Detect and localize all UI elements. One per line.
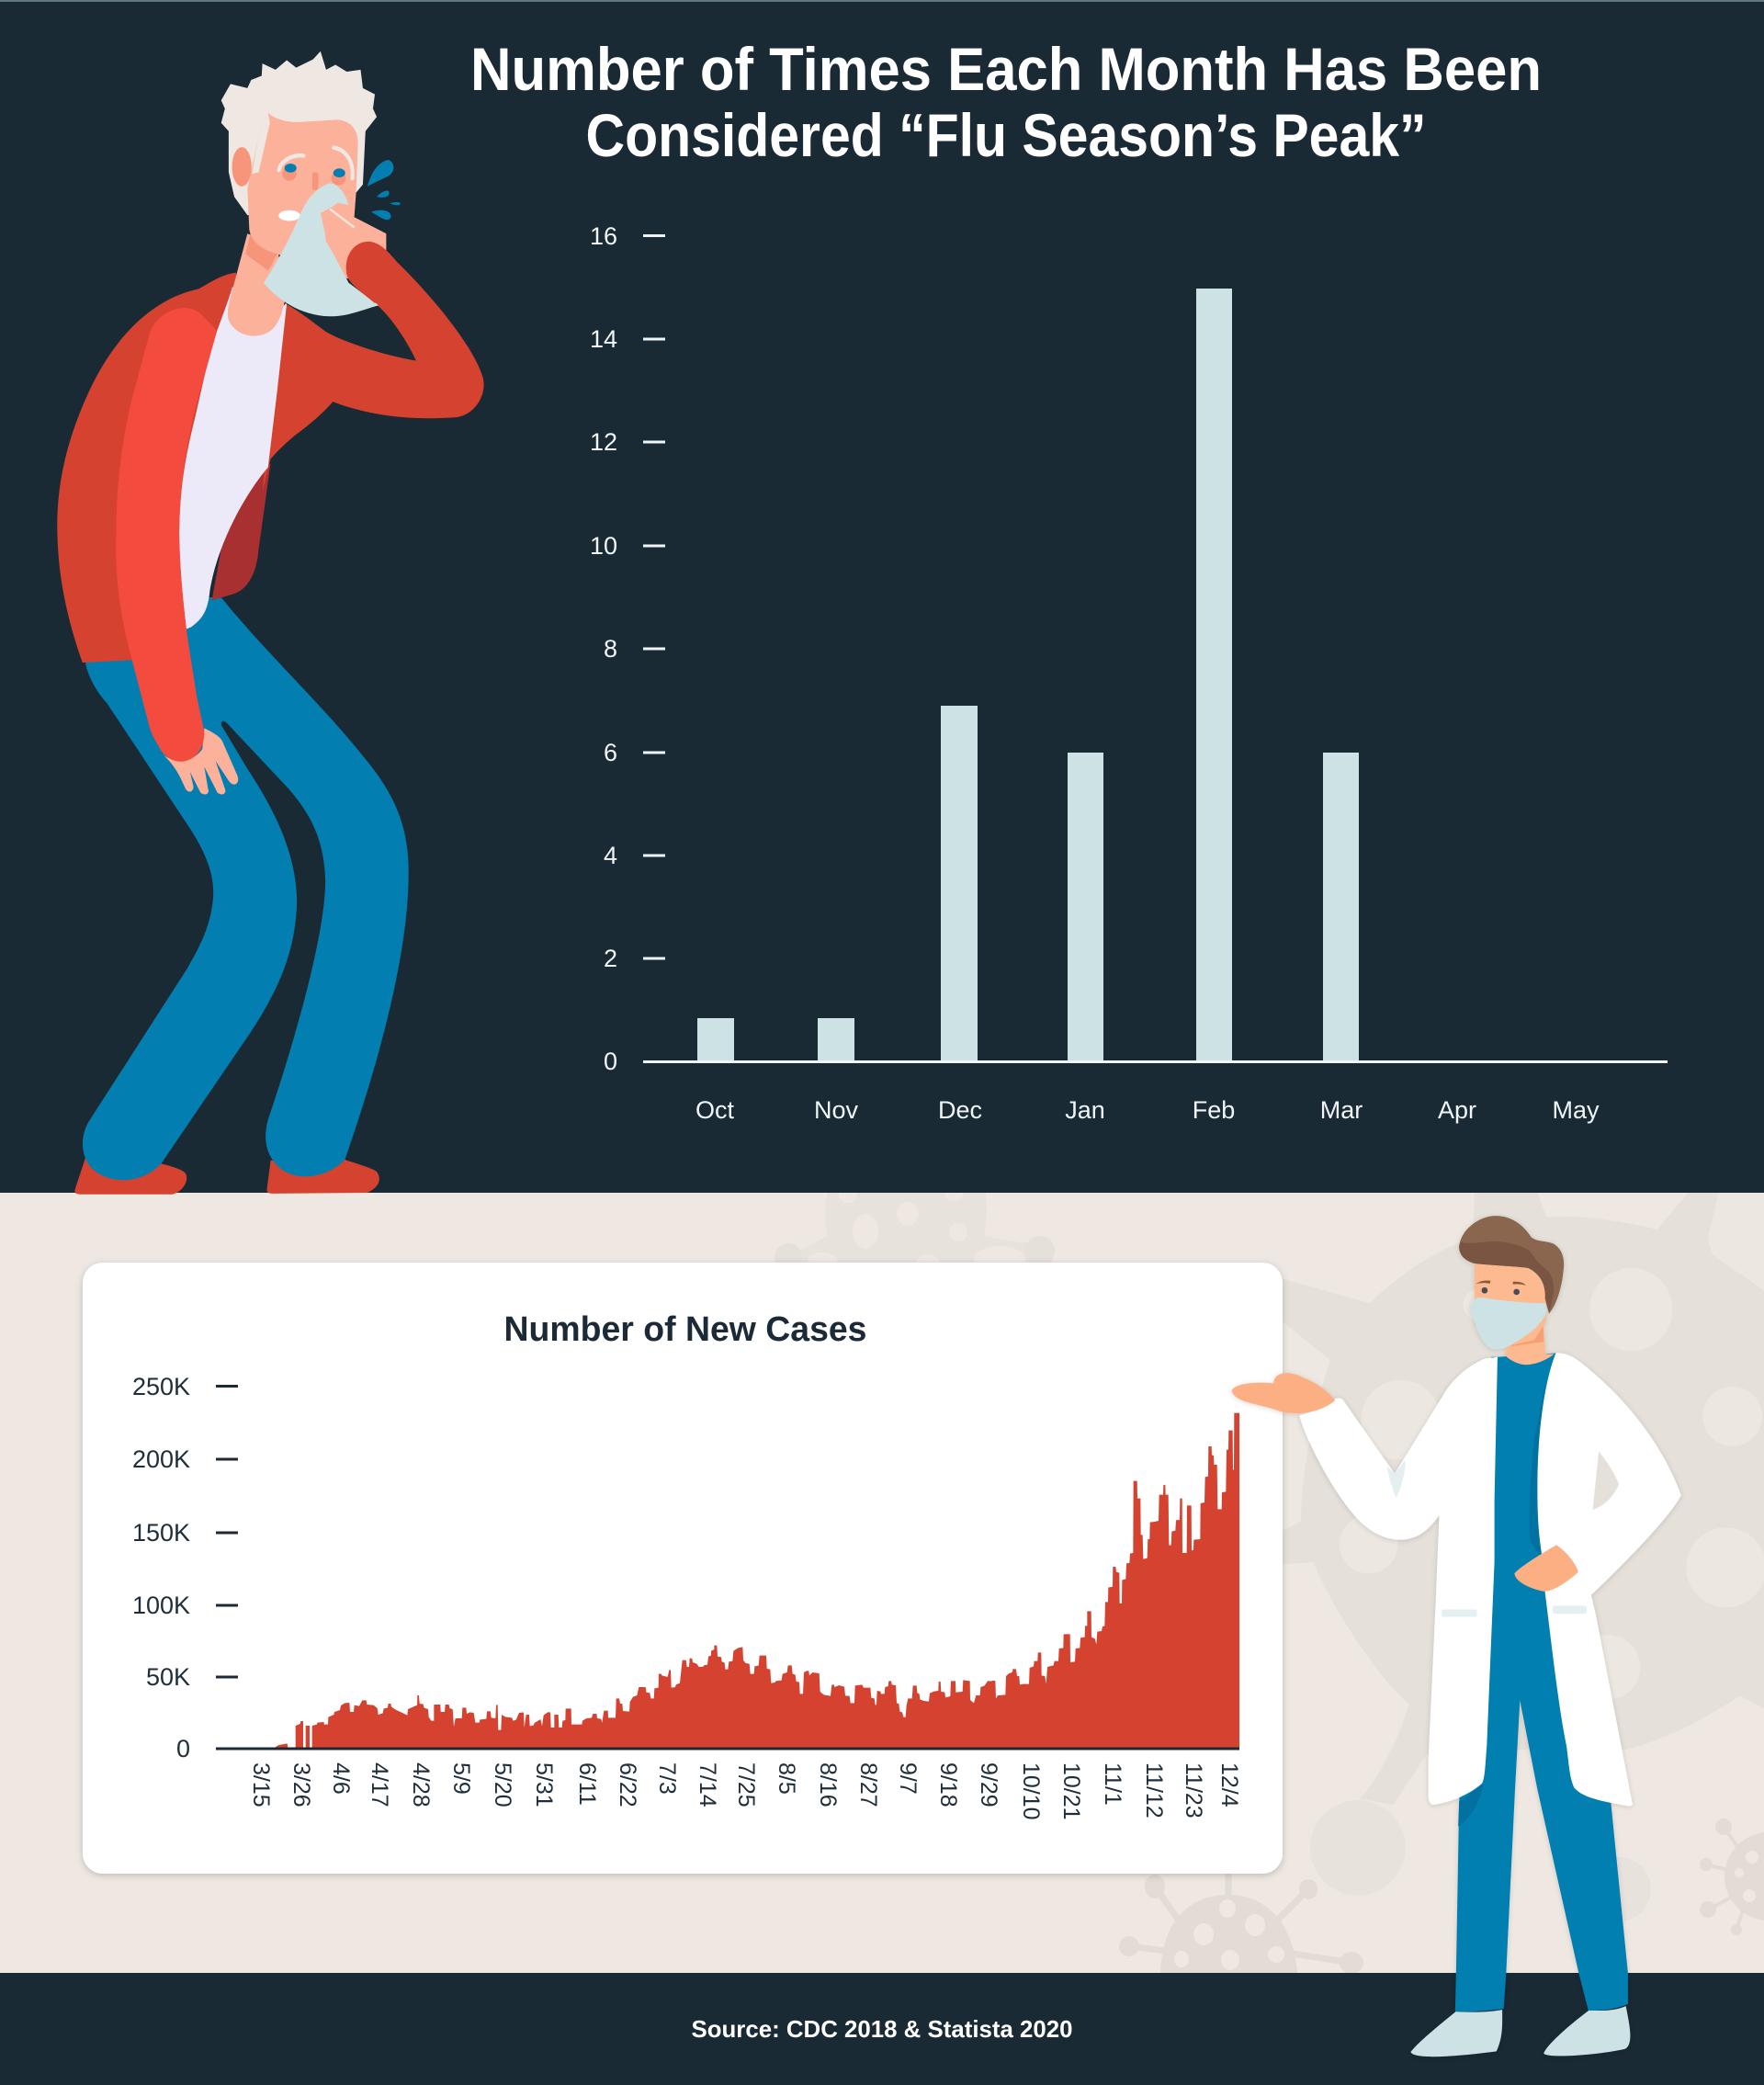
rotated date labels: 11/12 bbox=[1141, 1762, 1167, 1819]
rotated date labels: 9/29 bbox=[976, 1762, 1001, 1807]
illustration: sick man blowing nose bbox=[57, 51, 484, 1195]
rotated date labels: 9/7 bbox=[895, 1762, 921, 1795]
doctor: pointing hand bbox=[1232, 1373, 1335, 1413]
x axis month labels: Nov bbox=[814, 1096, 859, 1124]
y axis labels: 50K bbox=[146, 1663, 190, 1691]
doctor: shoes bbox=[1410, 2006, 1630, 2057]
panel: dark top background bbox=[0, 0, 1764, 1193]
panel: dark footer bbox=[0, 1973, 1764, 2085]
area chart: daily new cases bbox=[276, 1413, 1239, 1748]
background: virus below card bbox=[1119, 1865, 1363, 1974]
rotated date labels: 6/22 bbox=[615, 1762, 640, 1807]
illustration: doctor in white coat bbox=[1232, 1216, 1681, 2057]
rotated date labels: 5/20 bbox=[490, 1762, 515, 1807]
rotated date labels: 3/15 bbox=[248, 1762, 274, 1807]
rotated date labels: 6/11 bbox=[574, 1762, 600, 1806]
rotated date labels: 4/6 bbox=[328, 1762, 354, 1795]
y axis labels and ticks bbox=[590, 222, 665, 1075]
rotated date labels: 12/4 bbox=[1216, 1762, 1242, 1807]
man: sneeze droplets bbox=[368, 160, 401, 220]
rotated date labels: 8/16 bbox=[815, 1762, 841, 1807]
y axis ticks bbox=[216, 1386, 238, 1677]
rotated date labels: 4/28 bbox=[408, 1762, 434, 1807]
rotated date labels: 10/10 bbox=[1018, 1762, 1044, 1820]
bar chart: flu season peak by month bbox=[590, 222, 1668, 1124]
rotated date labels bbox=[248, 1762, 1242, 1820]
x axis line bbox=[643, 1060, 1668, 1063]
bars bbox=[697, 289, 1359, 1061]
doctor: body bbox=[1299, 1216, 1681, 2011]
x axis month labels: Apr bbox=[1438, 1096, 1476, 1124]
x axis month labels: May bbox=[1552, 1096, 1600, 1124]
rotated date labels: 10/21 bbox=[1058, 1762, 1084, 1820]
y axis labels and ticks: 16 bbox=[590, 222, 617, 250]
x axis month labels: Mar bbox=[1320, 1096, 1363, 1124]
y axis labels: 100K bbox=[132, 1592, 190, 1619]
rotated date labels: 11/23 bbox=[1181, 1762, 1206, 1819]
y axis labels: 200K bbox=[132, 1445, 190, 1473]
x axis month labels bbox=[695, 1096, 1600, 1124]
title: Number of Times Each Month Has Been bbox=[470, 35, 1542, 103]
source note: Source: CDC 2018 & Statista 2020 bbox=[691, 2015, 1073, 2043]
rotated date labels: 5/9 bbox=[448, 1762, 474, 1795]
y axis labels and ticks: 0 bbox=[604, 1048, 617, 1075]
y axis labels and ticks: 4 bbox=[604, 842, 617, 869]
doctor: hand on hip bbox=[1514, 1545, 1578, 1592]
y axis labels: 250K bbox=[132, 1373, 190, 1400]
y axis labels: 150K bbox=[132, 1519, 190, 1547]
man: shoes and legs bbox=[74, 597, 409, 1195]
y axis labels and ticks: 10 bbox=[590, 532, 617, 560]
rotated date labels: 9/18 bbox=[935, 1762, 961, 1807]
title bbox=[470, 35, 1542, 169]
y axis labels bbox=[132, 1373, 190, 1762]
y axis labels and ticks: 8 bbox=[604, 635, 617, 663]
title: Considered “Flu Season’s Peak” bbox=[586, 101, 1426, 169]
rotated date labels: 7/25 bbox=[733, 1762, 759, 1807]
x axis month labels: Dec bbox=[938, 1096, 982, 1124]
man: tissue bbox=[264, 183, 379, 316]
background: virus at right edge bbox=[1700, 1819, 1764, 1935]
y axis labels: 0 bbox=[176, 1735, 190, 1762]
rotated date labels: 7/3 bbox=[654, 1762, 680, 1795]
y axis labels and ticks: 14 bbox=[590, 325, 617, 353]
rotated date labels: 5/31 bbox=[531, 1762, 557, 1807]
x axis month labels: Jan bbox=[1065, 1096, 1105, 1124]
rotated date labels: 8/5 bbox=[774, 1762, 799, 1795]
x axis month labels: Feb bbox=[1193, 1096, 1235, 1124]
card heading: Number of New Cases bbox=[503, 1310, 867, 1349]
man: upper body and head bbox=[57, 51, 484, 762]
rotated date labels: 8/27 bbox=[855, 1762, 881, 1807]
x axis line bbox=[216, 1748, 1239, 1750]
card: number of new cases bbox=[83, 1263, 1283, 1874]
background: virus behind card top bbox=[775, 1236, 1055, 1263]
rotated date labels: 11/1 bbox=[1100, 1762, 1125, 1806]
background: large virus behind doctor bbox=[1283, 1193, 1764, 1805]
rotated date labels: 3/26 bbox=[288, 1762, 314, 1807]
rotated date labels: 4/17 bbox=[367, 1762, 392, 1807]
y axis labels and ticks: 2 bbox=[604, 945, 617, 972]
y axis labels and ticks: 12 bbox=[590, 428, 617, 456]
x axis month labels: Oct bbox=[695, 1096, 734, 1124]
panel: cream lower background with virus pattern bbox=[0, 1188, 1764, 1974]
rotated date labels: 7/14 bbox=[695, 1762, 720, 1807]
y axis labels and ticks: 6 bbox=[604, 739, 617, 766]
